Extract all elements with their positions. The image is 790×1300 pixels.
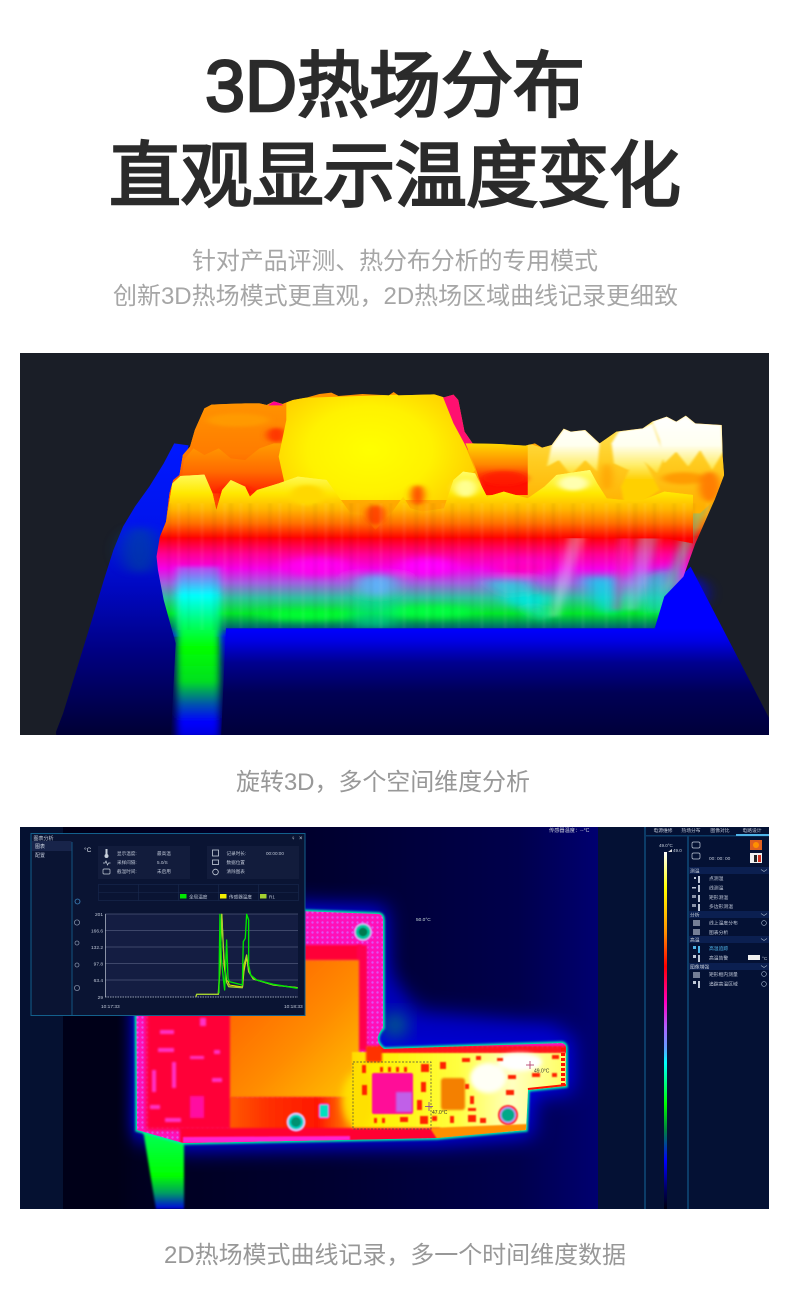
tool icons — [692, 876, 700, 988]
teal tint on plate — [121, 527, 159, 573]
tabs: 电路设计 — [742, 827, 762, 834]
wall cool streaks — [260, 558, 671, 628]
section header labels: 高温 — [690, 936, 700, 944]
tabs: 热场分布 — [681, 827, 701, 834]
tool labels: 图表分析 — [709, 929, 728, 936]
caption: 2D curve recording: 2D热场模式曲线记录，多一个时间维度数据 — [164, 1242, 626, 1269]
info card left — [98, 846, 190, 879]
left darkness — [110, 1016, 133, 1148]
info card left: 最高温 — [157, 850, 171, 857]
scale labels — [659, 843, 682, 853]
right side spikes — [549, 500, 710, 617]
y axis labels: 201 — [95, 912, 103, 918]
left hollow — [267, 428, 286, 442]
info card left: 5.0/S — [157, 860, 168, 865]
left magenta pads — [150, 1018, 222, 1122]
marker labels: 47.0°C — [432, 1110, 448, 1116]
base plate — [56, 443, 226, 737]
orange patch — [441, 1078, 465, 1110]
front ridge — [162, 470, 693, 543]
title — [109, 47, 681, 217]
info card left: 截温时间: — [117, 868, 137, 875]
section header labels: 图像增强 — [690, 964, 709, 970]
info card right: 数据位置 — [226, 859, 245, 866]
hole bottom middle — [286, 1112, 306, 1132]
thermal image — [63, 826, 598, 1209]
info card right — [207, 846, 299, 879]
cyan green pillar — [177, 567, 220, 737]
y axis labels: 166.6 — [91, 928, 103, 934]
white hot peaks — [547, 416, 723, 502]
vertical streak texture — [149, 503, 734, 630]
panel: 3D heat field — [20, 353, 770, 737]
section headers — [689, 867, 769, 970]
tool labels: 点测温 — [709, 875, 724, 882]
record row: 00: 00: 00 — [709, 856, 731, 862]
section header labels: 测温 — [690, 868, 700, 874]
pit — [465, 443, 535, 495]
panel: 2D thermal software — [20, 826, 769, 1209]
alarm input — [748, 955, 768, 962]
sidebar items: 配置 — [35, 853, 45, 859]
info card left: 显示温度: — [117, 850, 137, 857]
orange block — [230, 960, 359, 1098]
ridge highlights — [291, 471, 589, 525]
eye toggles — [762, 921, 766, 986]
window buttons — [291, 836, 303, 842]
right peaks — [528, 416, 724, 513]
legend table: R1 — [269, 894, 275, 900]
side tool icons — [74, 899, 80, 991]
info card left: 未启用 — [157, 868, 171, 875]
subtitle — [113, 248, 678, 310]
right end red frame — [528, 1086, 566, 1090]
sidebar items: 图表 — [35, 843, 45, 850]
legend table: 传感器温度 — [229, 894, 252, 900]
record row — [692, 853, 762, 863]
bottom magenta edge — [183, 1136, 350, 1143]
label ambient: 50.0°C — [416, 917, 431, 923]
tool labels: 多边形测温 — [709, 903, 733, 910]
panel dividers — [644, 827, 646, 1209]
tool labels — [709, 875, 738, 988]
subtitle: 创新3D热场模式更直观，2D热场区域曲线记录更细致 — [113, 283, 678, 310]
window buttons: × — [299, 836, 303, 842]
section chevrons — [761, 870, 767, 968]
heat mountain — [149, 390, 734, 737]
y axis labels: 63.4 — [94, 978, 103, 984]
camera icon — [103, 869, 110, 874]
sidebar divider — [72, 842, 73, 1015]
line chart — [91, 912, 303, 1010]
tool labels: 矩形框内测量 — [709, 971, 738, 978]
window title: 图表分析 — [34, 835, 54, 842]
ridge orange overlay — [162, 470, 693, 543]
wave icon — [103, 861, 110, 865]
notch blue glow — [383, 970, 560, 1045]
marker labels — [432, 1068, 550, 1116]
y axis labels — [91, 912, 103, 1001]
yellow strip — [352, 1052, 566, 1132]
measurement box — [353, 1062, 431, 1129]
marker high — [526, 1061, 534, 1069]
disk icon — [212, 850, 218, 856]
tabs: 图像对比 — [710, 827, 730, 834]
chart analysis window — [31, 834, 305, 1016]
marker labels: 49.0°C — [534, 1068, 550, 1074]
pink back edge — [442, 393, 474, 450]
bottom right band — [430, 1124, 528, 1139]
time labels: 10:18:33 — [284, 1004, 303, 1010]
board edge glow — [136, 905, 566, 1143]
scale labels: 49.0°C — [659, 843, 674, 848]
colour scale — [664, 852, 667, 1209]
right end pads — [561, 1048, 565, 1086]
left orange block — [164, 400, 293, 527]
tabs — [653, 827, 762, 834]
section header labels: 分析 — [690, 912, 700, 918]
subtitle: 针对产品评测、热分布分析的专用模式 — [192, 248, 598, 275]
orange dips on right — [601, 463, 720, 502]
thermometer icon — [104, 849, 108, 858]
tool labels: 线上温度分布 — [709, 920, 738, 926]
info card left: 采样间隔: — [117, 859, 137, 866]
top red wedge — [366, 1046, 382, 1062]
scale labels: 49.0 — [673, 848, 682, 853]
info card right: 清除图表 — [226, 868, 245, 875]
hole top right — [354, 923, 372, 941]
sidebar items — [32, 841, 72, 859]
time labels: 10:17:33 — [101, 1004, 120, 1010]
top rows — [300, 918, 362, 946]
capture row — [692, 840, 762, 850]
marker low — [425, 1102, 433, 1111]
info card right: 00:00:00 — [266, 851, 284, 856]
refresh icon — [213, 869, 218, 875]
tool labels: 矩形测温 — [709, 894, 728, 901]
curves — [196, 914, 298, 997]
lower left red orange — [230, 1097, 355, 1132]
small magenta tip — [268, 402, 284, 406]
left red zone — [142, 1016, 234, 1134]
base plate right — [219, 567, 770, 737]
chip cool part — [396, 1092, 412, 1112]
right red column — [357, 945, 367, 1050]
folder icon — [212, 860, 218, 864]
center yellow block — [279, 393, 475, 500]
axes — [105, 914, 298, 997]
top pads row — [378, 1046, 568, 1053]
software background — [20, 827, 769, 1209]
time labels — [101, 1004, 303, 1010]
white hot area — [470, 1053, 542, 1093]
sensor temperature label: 传感器温度：--°C — [549, 826, 590, 834]
inner corner glow — [383, 1013, 407, 1037]
tool labels: 高温告警 — [709, 954, 728, 962]
board — [130, 900, 570, 1150]
support leg — [143, 1130, 184, 1209]
hole bottom right — [498, 1105, 518, 1125]
chip — [372, 1073, 413, 1114]
alarm input: °C — [762, 956, 768, 962]
right plate highlight — [694, 573, 718, 607]
active tab underline — [736, 834, 769, 836]
tool labels: 高温追踪 — [709, 945, 728, 952]
legend table — [98, 884, 298, 900]
top red strip — [300, 945, 362, 961]
info card right: 记录时长: — [226, 850, 246, 857]
y axis labels: 29 — [98, 995, 103, 1001]
y axis labels: 132.2 — [91, 945, 103, 951]
window buttons: ♀ — [291, 836, 296, 842]
section header labels — [690, 868, 709, 970]
yellow fade into block — [342, 1072, 374, 1128]
bottom edge row — [180, 1128, 440, 1144]
title: 直观显示温度变化 — [109, 137, 681, 217]
y axis labels: 97.8 — [94, 962, 103, 968]
red components — [362, 1055, 559, 1124]
tabs: 电源维修 — [653, 827, 673, 834]
scale pointer — [668, 849, 672, 852]
title: 3D热场分布 — [205, 47, 585, 127]
grid lines — [105, 914, 298, 980]
tool labels: 线测温 — [709, 884, 724, 892]
red hollows — [207, 413, 269, 505]
unit: °C — [84, 846, 92, 854]
legend table: 全局温度 — [189, 894, 208, 900]
small cool part — [319, 1104, 329, 1118]
caption: rotate 3D: 旋转3D，多个空间维度分析 — [236, 769, 530, 796]
tool labels: 追踪高温区域 — [709, 980, 738, 988]
right tool panel — [598, 827, 769, 1209]
blue halo — [136, 905, 566, 1143]
left second hump row — [180, 443, 291, 493]
